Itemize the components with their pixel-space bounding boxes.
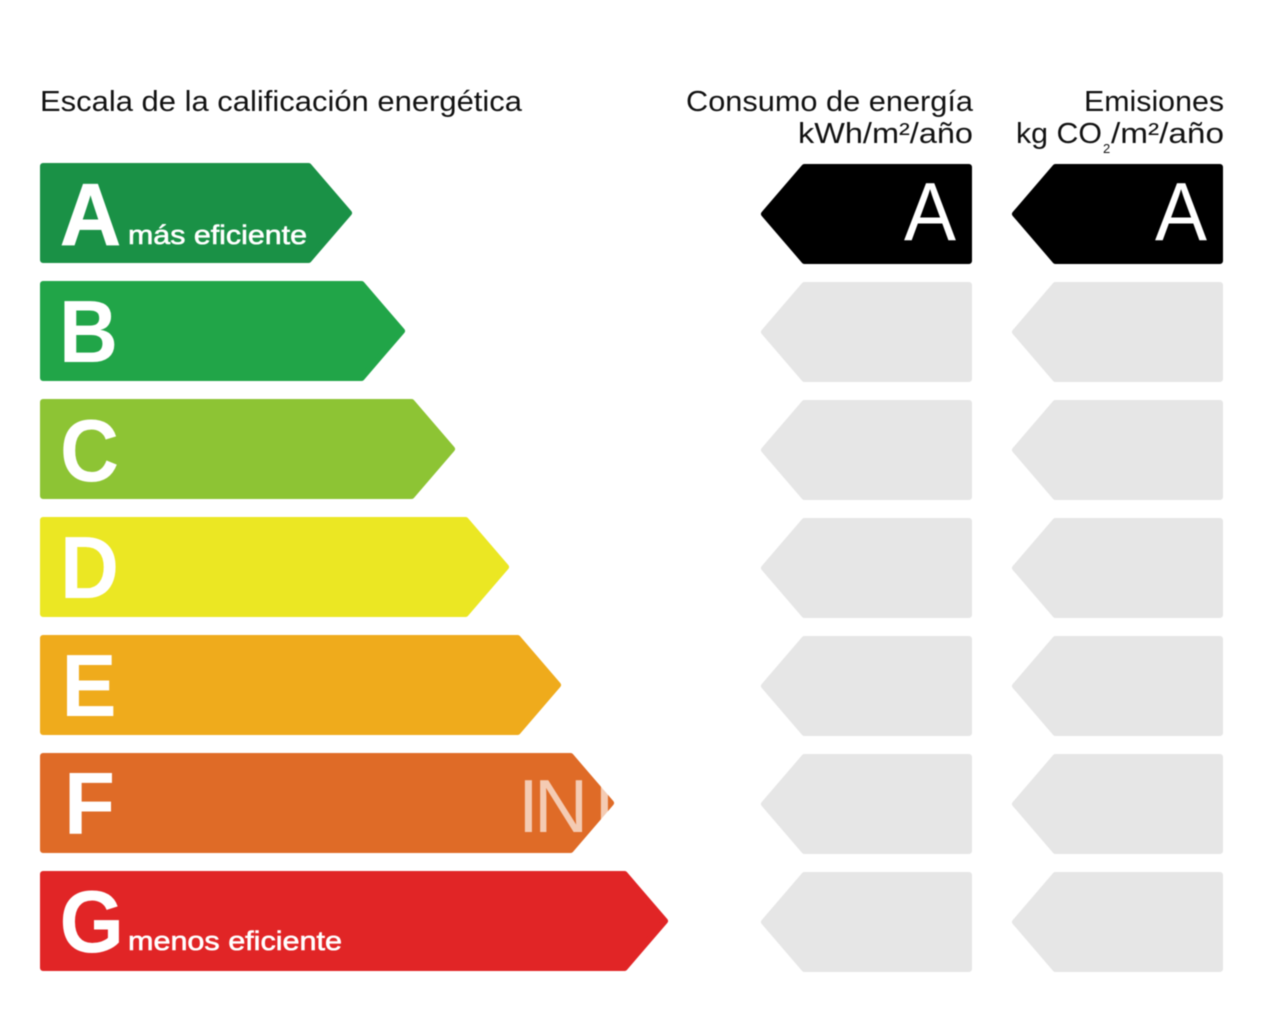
heading: emissions xyxy=(1016,86,1224,156)
heading: scale title: Escala de la calificación energética xyxy=(40,86,522,118)
bar B: B xyxy=(59,282,118,381)
consumption rating A xyxy=(764,165,969,261)
bar E: E xyxy=(62,636,116,735)
bar F xyxy=(43,754,611,853)
heading: energy consumption: Consumo de energía xyxy=(686,86,973,118)
empty emissions slots B to G xyxy=(1015,285,1220,969)
bar D xyxy=(43,518,506,617)
heading: emissions: Emisiones xyxy=(1084,86,1224,118)
consumption rating A: A xyxy=(904,165,957,258)
heading: emissions: 2 xyxy=(1103,141,1110,156)
bar C xyxy=(43,401,452,500)
bar A: most efficient: más eficiente xyxy=(128,220,307,250)
heading: energy consumption: kWh/m²/año xyxy=(798,118,973,150)
bar G: least efficient: G xyxy=(60,872,124,971)
bar B xyxy=(43,282,402,381)
bar G: least efficient xyxy=(43,872,665,971)
emissions rating A xyxy=(1015,165,1220,261)
bar A: most efficient: A xyxy=(60,165,121,264)
heading: emissions: kg CO xyxy=(1016,118,1102,150)
emissions rating A: A xyxy=(1155,165,1208,258)
bar F: F xyxy=(64,754,115,853)
bar G: least efficient: menos eficiente xyxy=(128,926,342,956)
bar A: most efficient xyxy=(43,165,349,264)
bar D: D xyxy=(60,518,119,617)
bar E xyxy=(43,636,558,735)
watermark: INI xyxy=(518,764,615,848)
heading: energy consumption xyxy=(686,86,973,150)
empty consumption slots B to G xyxy=(764,285,969,969)
heading: emissions: /m²/año xyxy=(1111,118,1224,150)
bar C: C xyxy=(60,401,119,500)
